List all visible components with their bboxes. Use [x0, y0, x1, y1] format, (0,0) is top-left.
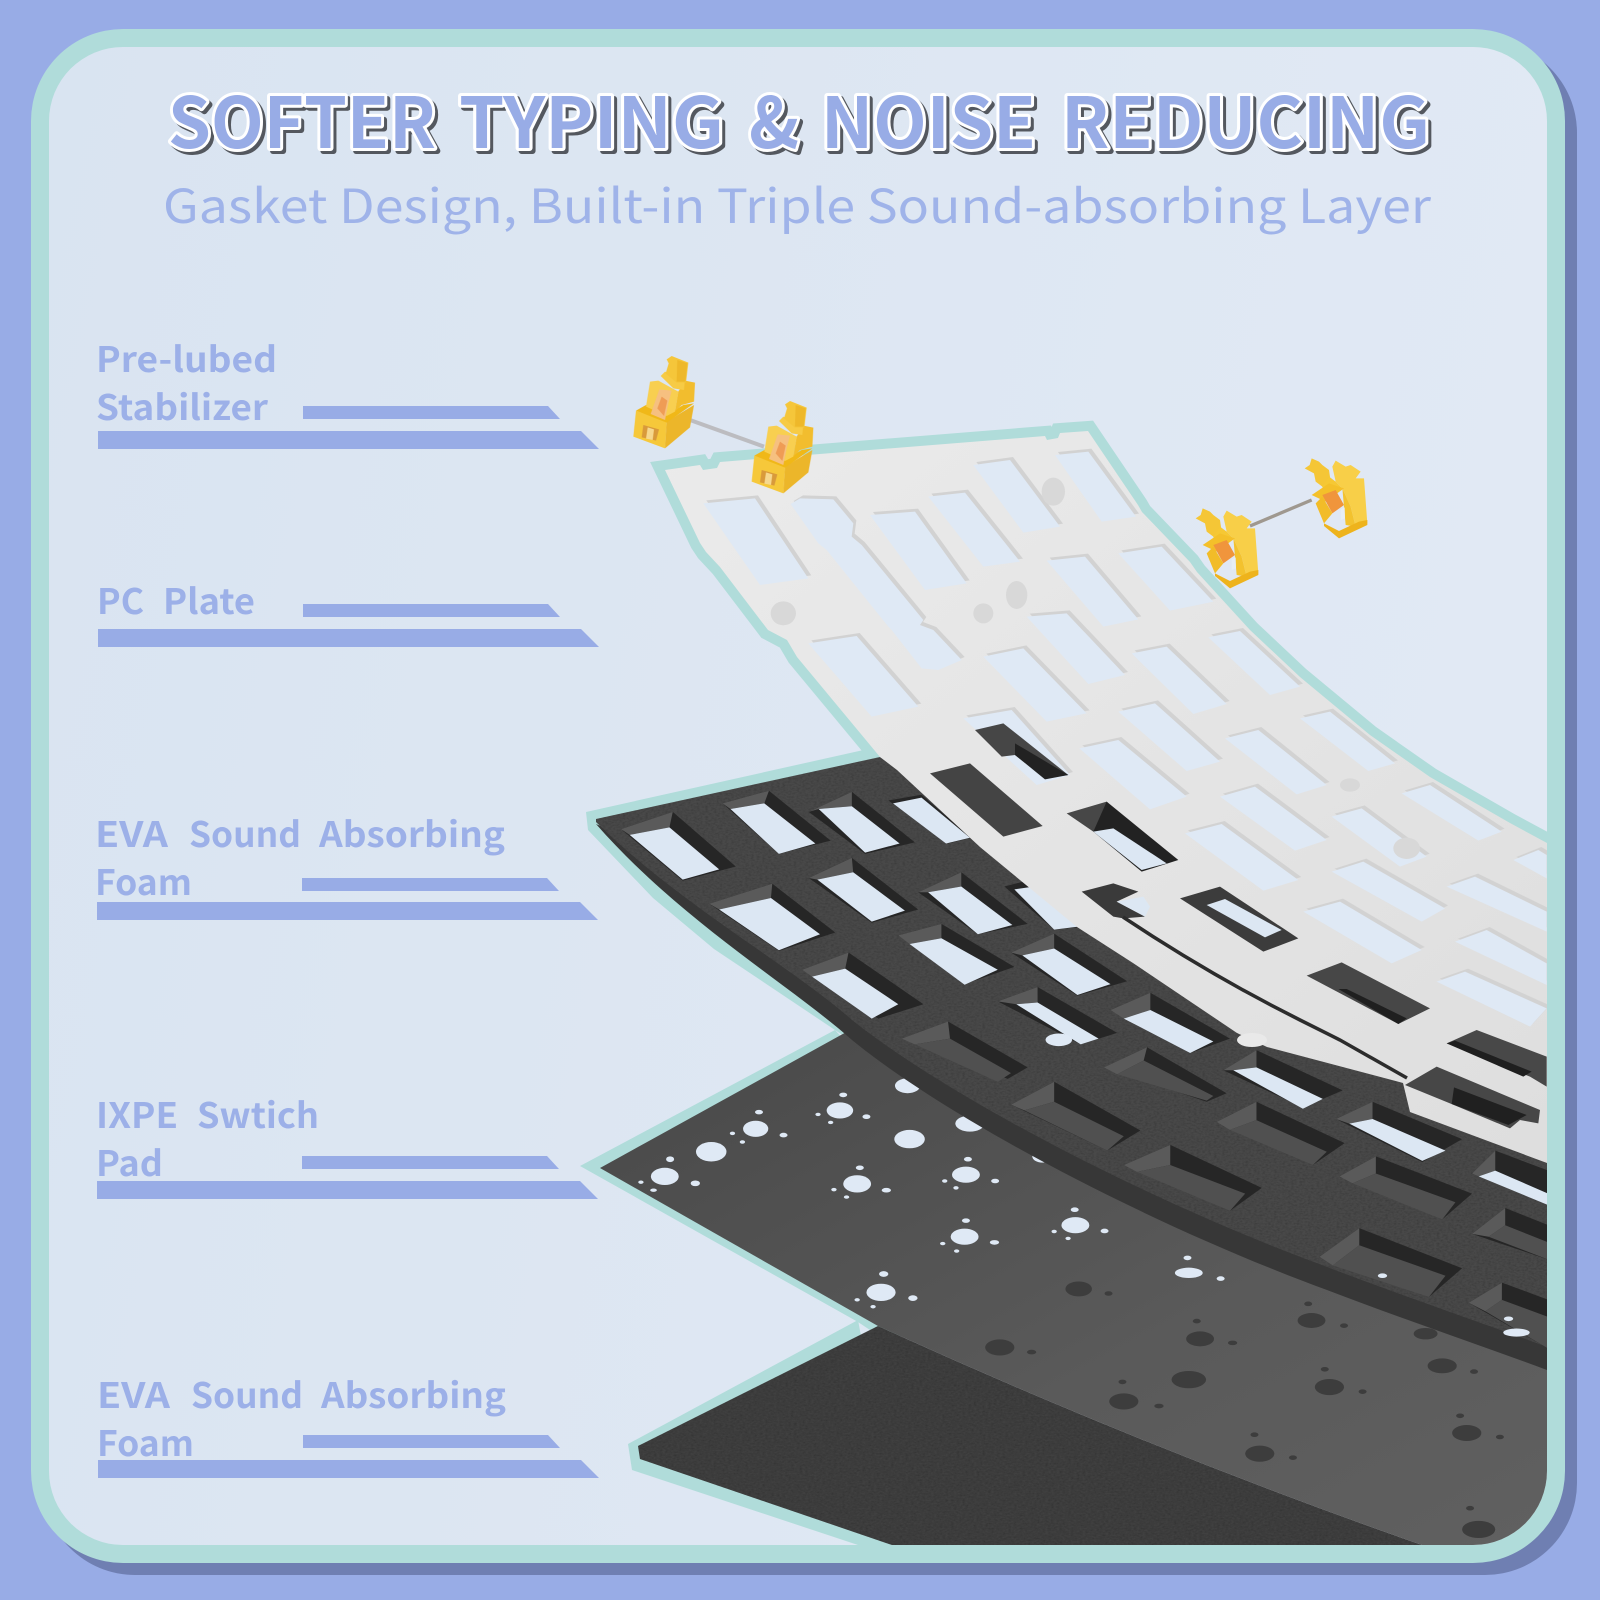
label: eva sound absorbing foam lower: Sound: [191, 1368, 303, 1419]
stabilizer right pair: [1196, 458, 1367, 588]
layer: upper EVA foam: [596, 757, 1548, 1370]
foam switch cut-outs: [621, 791, 1548, 1349]
stabilizer left pair: [633, 356, 813, 493]
IXPE pad holes: [638, 1062, 1504, 1538]
label: ixpe switch pad: Swtich: [197, 1088, 319, 1139]
label: pre-lubed stabilizer: [96, 332, 599, 449]
label: pre-lubed stabilizer: Pre-lubed: [96, 332, 277, 383]
label: pc plate: Plate: [163, 574, 255, 625]
title: [168, 68, 1430, 169]
label: ixpe switch pad: [96, 1088, 598, 1199]
plate switch windows: [703, 452, 1547, 1027]
label: eva sound absorbing foam upper: Sound: [189, 807, 301, 858]
plate flex gap: [1123, 917, 1407, 1078]
plate mounting bumps: [771, 478, 1420, 859]
label: pc plate: [97, 574, 599, 647]
layer: PC plate: [665, 431, 1547, 1163]
title: TYPING: [459, 68, 724, 169]
exploded keyboard layers: [580, 356, 1548, 1545]
label: eva sound absorbing foam lower: Foam: [97, 1416, 194, 1467]
plate lobe: [1237, 1035, 1263, 1047]
label: eva sound absorbing foam upper: [95, 807, 598, 920]
label: eva sound absorbing foam upper: EVA: [95, 807, 169, 858]
label: pre-lubed stabilizer: Stabilizer: [96, 380, 269, 431]
label: eva sound absorbing foam upper: Absorbing: [318, 807, 505, 858]
label: ixpe switch pad: Pad: [96, 1136, 163, 1187]
layer: bottom EVA foam: [638, 1326, 1422, 1545]
label: ixpe switch pad: IXPE: [96, 1088, 178, 1139]
label: pc plate: PC: [97, 574, 144, 625]
label: eva sound absorbing foam lower: EVA: [97, 1368, 171, 1419]
label: eva sound absorbing foam lower: [97, 1368, 599, 1478]
subtitle: Gasket Design, Built-in Triple Sound-absorbing Layer: [163, 168, 1432, 237]
title: REDUCING: [1061, 68, 1430, 169]
title: &: [749, 68, 799, 169]
foam visible through plate: [930, 723, 1547, 1128]
title: SOFTER: [168, 68, 436, 169]
layer: IXPE switch pad: [600, 1030, 1547, 1545]
title: NOISE: [821, 68, 1036, 169]
teal layer outlines: [580, 431, 1547, 1545]
label: eva sound absorbing foam upper: Foam: [95, 855, 192, 906]
label: eva sound absorbing foam lower: Absorbing: [320, 1368, 506, 1419]
